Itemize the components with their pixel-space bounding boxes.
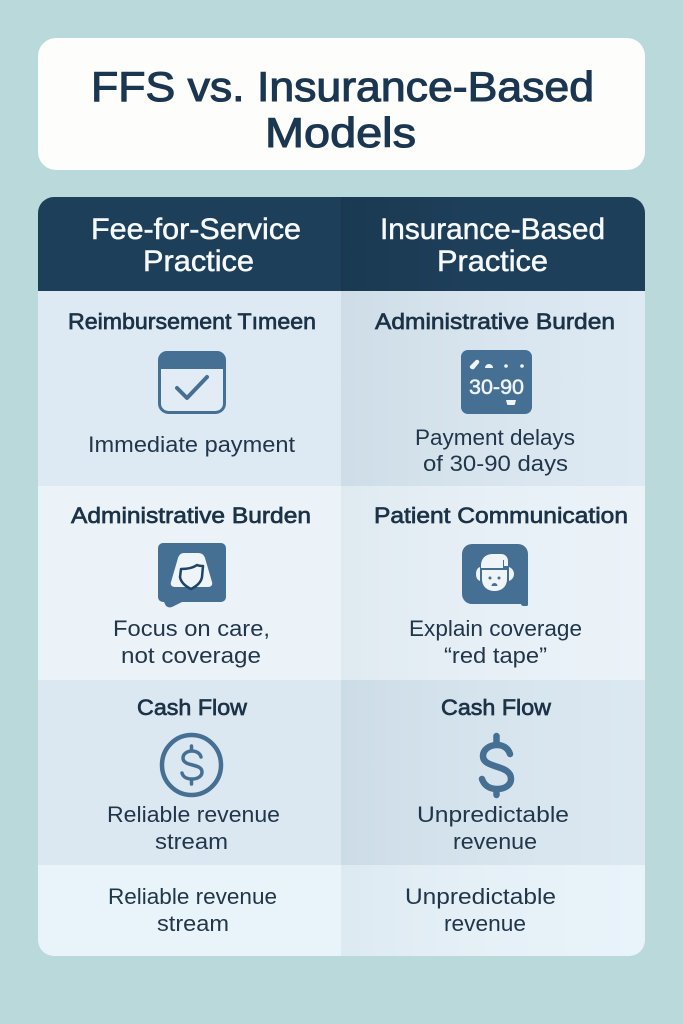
icon: dollar coin [162, 735, 221, 795]
cell: administrative burden, fee-for-service: Administrative Burden [71, 503, 311, 528]
header: insurance-based: Practice [437, 245, 548, 278]
text: explain coverage: Explain coverage [409, 616, 582, 641]
cell: cash flow, fee-for-service: Cash Flow [137, 695, 248, 720]
text: reliable revenue: stream [155, 829, 228, 854]
text: explain coverage [409, 616, 582, 668]
title: Models [265, 109, 416, 156]
icon: 30-90 day calendar [461, 350, 532, 414]
text: reliable revenue stream: Reliable revenue [108, 884, 277, 909]
icon: 30-90 day calendar: 30-90 [469, 376, 524, 399]
title [91, 63, 594, 156]
icon: dollar sign [482, 736, 511, 795]
cell: cash flow, fee-for-service [107, 695, 280, 854]
header: fee-for-service: Practice [143, 245, 254, 278]
cell: cash flow, insurance [417, 695, 569, 854]
row 1 [38, 291, 645, 486]
cell: administrative burden, insurance: Administrative Burden [375, 309, 615, 334]
text: payment delays: Payment delays [415, 425, 575, 450]
text: reliable revenue: Reliable revenue [107, 802, 280, 827]
header: insurance-based: Insurance-Based [380, 213, 605, 246]
text: unpredictable revenue: Unpredictable [405, 884, 556, 909]
header: fee-for-service: Fee-for-Service [91, 213, 301, 246]
cell: cash flow, insurance: Cash Flow [441, 695, 552, 720]
cell: patient communication [374, 503, 628, 668]
text: unpredictable revenue [418, 806, 568, 849]
header: insurance-based [382, 217, 604, 272]
title: FFS vs. Insurance-Based [91, 63, 594, 110]
text: payment delays [415, 425, 575, 476]
icon: calendar check [158, 351, 226, 412]
text: reliable revenue [108, 806, 279, 849]
cell: patient communication: Patient Communication [374, 503, 628, 528]
text: unpredictable revenue: revenue [453, 829, 537, 854]
text: reliable revenue stream [110, 888, 276, 931]
row 4 [38, 865, 645, 956]
text: unpredictable revenue [406, 888, 555, 931]
row 3 [38, 680, 645, 865]
text: reliable revenue stream: stream [157, 911, 229, 936]
cell: reimbursement timeline: Immediate payment [88, 432, 296, 457]
text: focus on care: not coverage [121, 643, 261, 668]
icon: speech bubble with clinician [158, 543, 226, 607]
text: unpredictable revenue: Unpredictable [417, 802, 569, 827]
cell: administrative burden, fee-for-service [71, 503, 311, 668]
text: payment delays: of 30-90 days [423, 451, 568, 476]
text: focus on care [114, 620, 268, 668]
cell: administrative burden, insurance [375, 309, 615, 476]
text: unpredictable revenue: revenue [444, 911, 526, 936]
text: focus on care: Focus on care, [113, 616, 270, 641]
cell: reimbursement timeline: Reimbursement Tımeen [68, 309, 316, 334]
title panel [38, 38, 645, 170]
header: fee-for-service [93, 217, 300, 272]
column headers [38, 197, 645, 291]
text: explain coverage: “red tape” [444, 643, 547, 668]
cell: reimbursement timeline [68, 309, 316, 457]
row 2 [38, 486, 645, 680]
icon: speech bubble with patient [462, 544, 528, 606]
comparison table [38, 197, 645, 956]
